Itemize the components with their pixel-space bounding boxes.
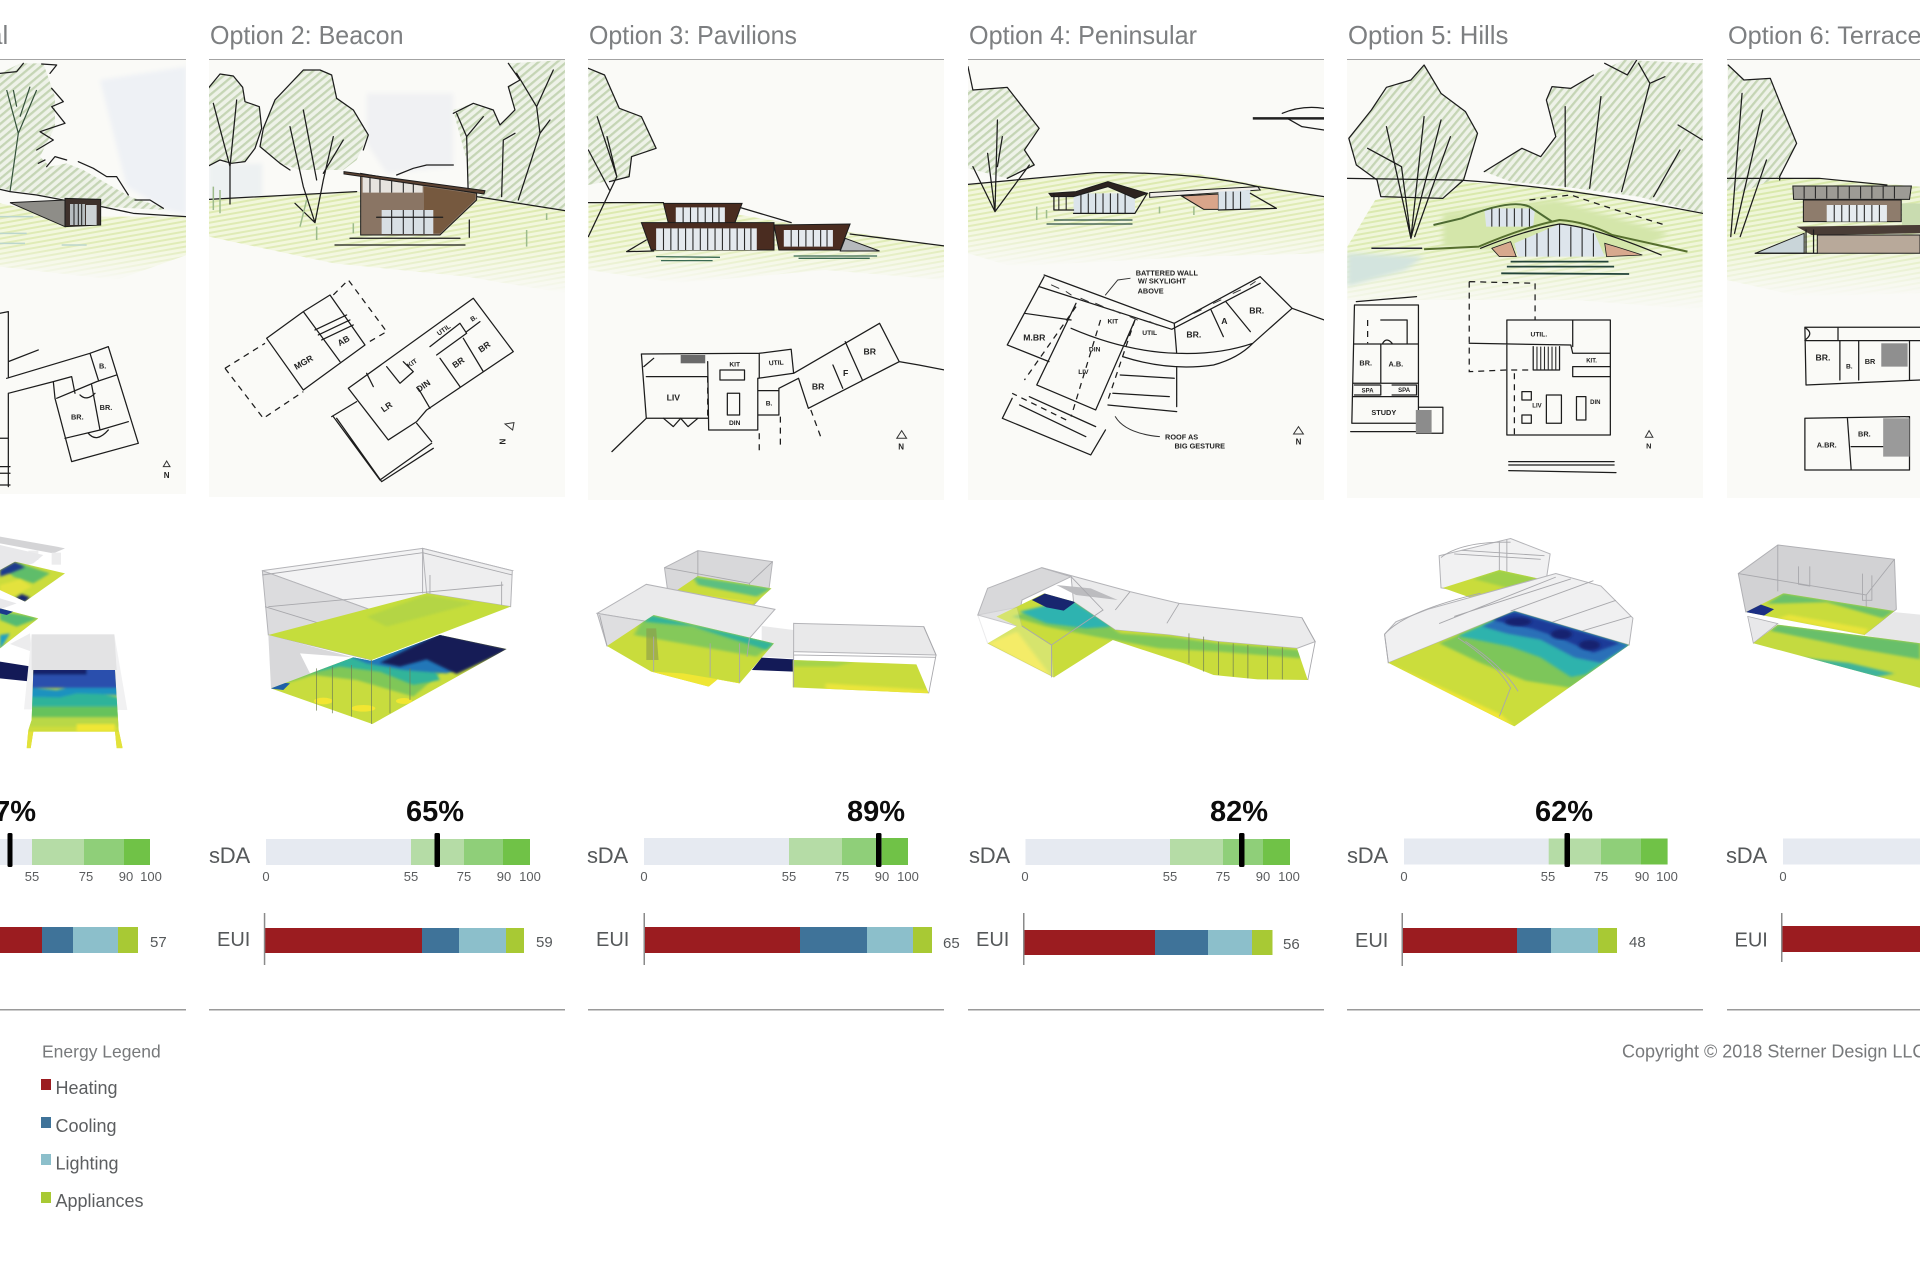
sketch: option 5 elevation and plan: A.B.	[1389, 360, 1403, 369]
sDA chart: option 2: sDA	[209, 843, 250, 868]
sketch: option 5 elevation and plan: DIN	[1590, 400, 1600, 406]
sDA chart: option 5: sDA	[1347, 843, 1388, 868]
EUI chart: option 3	[596, 913, 960, 965]
EUI chart: option 2	[217, 913, 553, 965]
EUI chart: option 2: EUI	[217, 929, 250, 951]
sDA chart: option 3: 75	[835, 869, 849, 884]
sketch: option 5 elevation and plan: N	[1646, 441, 1651, 450]
legend item: heating: Heating	[56, 1078, 118, 1098]
panel: option 4 peninsular	[968, 20, 1324, 1010]
EUI chart: option 4: EUI	[976, 929, 1009, 951]
daylight model: option 3	[597, 551, 936, 695]
sDA chart: option 2: 90	[497, 869, 511, 884]
sketch: option 4 elevation and plan: ABOVE	[1138, 286, 1164, 295]
sketch: option 6 elevation and plan: BR.	[1858, 430, 1871, 439]
sDA chart: option 3	[587, 796, 919, 884]
sketch: option 3 elevation and plan: LIV	[667, 393, 680, 403]
sDA chart: option 2: 65%	[406, 796, 464, 828]
sDA chart: option 2	[209, 796, 541, 884]
sketch: option 3 elevation and plan: BR	[812, 381, 825, 391]
EUI chart: option 6	[1734, 913, 1920, 962]
sketch: option 2 elevation and plan: LR	[379, 399, 395, 414]
sketch: option 3 elevation and plan: KIT	[729, 362, 740, 369]
sDA chart: option 5: 100	[1656, 869, 1678, 884]
panel: option 5 hills	[1347, 20, 1703, 1010]
sketch: option 1 elevation and plan	[0, 60, 187, 494]
sDA chart: option 1	[0, 796, 162, 884]
sketch: option 3 elevation and plan: F	[843, 368, 848, 378]
sketch: option 4 elevation and plan: BR.	[1186, 329, 1201, 339]
sketch: option 3 elevation and plan: DIN	[729, 420, 741, 427]
sketch: option 2 elevation and plan: BR	[476, 339, 493, 355]
EUI chart: option 5	[1355, 913, 1646, 966]
EUI chart: option 5: EUI	[1355, 930, 1388, 952]
sDA chart: option 3: 100	[897, 869, 919, 884]
sketch: option 5 elevation and plan: UTIL.	[1531, 332, 1547, 339]
sDA chart: option 3: 89%	[847, 796, 905, 828]
daylight model: option 2	[262, 548, 512, 727]
sketch: option 6 elevation and plan: BR.	[1815, 353, 1830, 363]
sketch: option 2 elevation and plan: B.	[469, 314, 479, 324]
sketch: option 4 elevation and plan: UTIL	[1142, 330, 1157, 337]
sDA chart: option 5	[1347, 796, 1678, 884]
sDA chart: option 5: 75	[1594, 869, 1608, 884]
EUI chart: option 6: EUI	[1734, 930, 1768, 952]
sDA chart: option 4	[969, 796, 1300, 884]
sketch: option 5 elevation and plan: BR.	[1359, 359, 1372, 368]
EUI chart: option 4: 56	[1283, 936, 1300, 953]
sDA chart: option 4: 90	[1256, 869, 1270, 884]
sketch: option 1 elevation and plan: N	[164, 471, 170, 480]
title: option 6: Option 6: Terrace	[1728, 22, 1920, 50]
sDA chart: option 6: 0	[1779, 869, 1787, 884]
EUI chart: option 3: 65	[943, 935, 960, 952]
panel: option 2 beacon	[209, 20, 565, 1010]
sDA chart: option 4: 55	[1163, 869, 1177, 884]
sDA chart: option 3: 0	[640, 869, 648, 884]
sDA chart: option 4: 0	[1021, 869, 1029, 884]
legend heading: Energy Legend	[42, 1042, 161, 1062]
sDA chart: option 2: 75	[457, 869, 471, 884]
sDA chart: option 3: sDA	[587, 843, 628, 868]
sDA chart: option 4: sDA	[969, 843, 1010, 868]
sketch: option 2 elevation and plan: UTIL	[436, 323, 452, 338]
sketch: option 5 elevation and plan: LIV	[1532, 403, 1542, 409]
sketch: option 2 elevation and plan: BR	[450, 354, 467, 370]
daylight model: option 5	[1385, 539, 1633, 727]
sketch: option 3 elevation and plan: UTIL	[768, 360, 784, 367]
title: option 3: Option 3: Pavilions	[589, 20, 797, 50]
sDA chart: option 4: 100	[1278, 869, 1300, 884]
panel: option 1 (cropped at left edge)	[0, 20, 187, 1010]
legend item: lighting: Lighting	[56, 1154, 119, 1174]
sketch: option 4 elevation and plan: M.BR	[1023, 333, 1046, 343]
sketch: option 3 elevation and plan	[588, 60, 944, 452]
sketch: option 3 elevation and plan: BR	[863, 346, 877, 356]
sketch: option 5 elevation and plan: SPA	[1398, 388, 1411, 394]
sketch: option 4 elevation and plan: BIG GESTURE	[1174, 441, 1225, 450]
sketch: option 2 elevation and plan: MGR	[292, 353, 315, 372]
sDA chart: option 2: 0	[262, 869, 270, 884]
sketch: option 2 elevation and plan: KIT	[406, 358, 419, 370]
sketch: option 4 elevation and plan: A	[1221, 316, 1228, 326]
sDA chart: option 3: 55	[782, 869, 796, 884]
sketch: option 4 elevation and plan: N	[1296, 438, 1302, 447]
sketch: option 2 elevation and plan: AB	[336, 333, 351, 348]
sDA chart: option 5: 55	[1541, 869, 1555, 884]
sketch: option 2 elevation and plan: N	[499, 439, 508, 445]
title: option 2: Option 2: Beacon	[210, 20, 404, 50]
sDA chart: option 2: 100	[519, 869, 541, 884]
sketch: option 4 elevation and plan: BATTERED WALL	[1136, 269, 1198, 278]
sDA chart: option 1: 75	[79, 869, 93, 884]
sDA chart: option 6	[1726, 838, 1920, 884]
sDA chart: option 5: 90	[1635, 869, 1649, 884]
sDA chart: option 4: 75	[1216, 869, 1230, 884]
panel: option 6 terrace (cropped at right edge)	[1726, 22, 1920, 1010]
sDA chart: option 3: 90	[875, 869, 889, 884]
sketch: option 5 elevation and plan: SPA	[1362, 389, 1374, 395]
EUI chart: option 4	[976, 913, 1300, 965]
sketch: option 1 elevation and plan: BR.	[100, 403, 112, 412]
sketch: option 3 elevation and plan: N	[898, 442, 904, 451]
sDA chart: option 4: 82%	[1210, 796, 1268, 828]
sketch: option 2 elevation and plan: DIN	[414, 377, 432, 394]
copyright note: Copyright © 2018 Sterner Design LLC	[1622, 1042, 1920, 1062]
sDA chart: option 5: 0	[1400, 869, 1408, 884]
sketch: option 4 elevation and plan: W/ SKYLIGHT	[1138, 276, 1187, 285]
sDA chart: option 1: 100	[140, 869, 162, 884]
sketch: option 5 elevation and plan	[1347, 60, 1703, 498]
panel: option 3 pavilions	[587, 20, 960, 1010]
sDA chart: option 5: 62%	[1535, 796, 1593, 828]
daylight model: option 1	[0, 537, 130, 752]
daylight model: option 6	[1738, 545, 1920, 690]
sketch: option 5 elevation and plan: STUDY	[1371, 408, 1396, 417]
sketch: option 4 elevation and plan: DIN	[1089, 347, 1101, 354]
daylight model: option 4	[978, 568, 1315, 682]
sketch: option 6 elevation and plan: B.	[1846, 363, 1853, 370]
legend item: appliances: Appliances	[56, 1191, 144, 1211]
sketch: option 4 elevation and plan: ROOF AS	[1165, 432, 1198, 441]
sketch: option 4 elevation and plan: LIV	[1078, 369, 1089, 376]
sDA chart: option 1: 90	[119, 869, 133, 884]
sketch: option 4 elevation and plan: BR.	[1249, 305, 1264, 315]
EUI chart: option 1	[0, 927, 167, 953]
sketch: option 6 elevation and plan: A.BR.	[1817, 440, 1837, 449]
sketch: option 2 elevation and plan	[209, 60, 565, 497]
sketch: option 4 elevation and plan: KIT	[1107, 318, 1118, 325]
sketch: option 6 elevation and plan: BR	[1865, 357, 1876, 366]
sketch: option 6 elevation and plan	[1727, 60, 1920, 498]
sketch: option 3 elevation and plan: B.	[766, 400, 773, 407]
title: option 4: Option 4: Peninsular	[969, 20, 1197, 50]
sDA chart: option 2: 55	[404, 869, 418, 884]
EUI chart: option 5: 48	[1629, 934, 1646, 951]
EUI chart: option 2: 59	[536, 934, 553, 951]
legend item: cooling: Cooling	[56, 1116, 117, 1136]
EUI chart: option 3: EUI	[596, 929, 629, 951]
sketch: option 1 elevation and plan: BR.	[71, 412, 84, 421]
sketch: option 1 elevation and plan: B.	[99, 361, 106, 370]
sketch: option 4 elevation and plan	[968, 60, 1324, 456]
sketch: option 5 elevation and plan: KIT.	[1586, 359, 1597, 365]
legend: energy	[41, 1042, 161, 1211]
sDA chart: option 6: sDA	[1726, 843, 1767, 868]
sDA chart: option 1: 55	[25, 869, 39, 884]
EUI chart: option 1: 57	[150, 934, 167, 951]
title: option 5: Option 5: Hills	[1348, 20, 1508, 50]
